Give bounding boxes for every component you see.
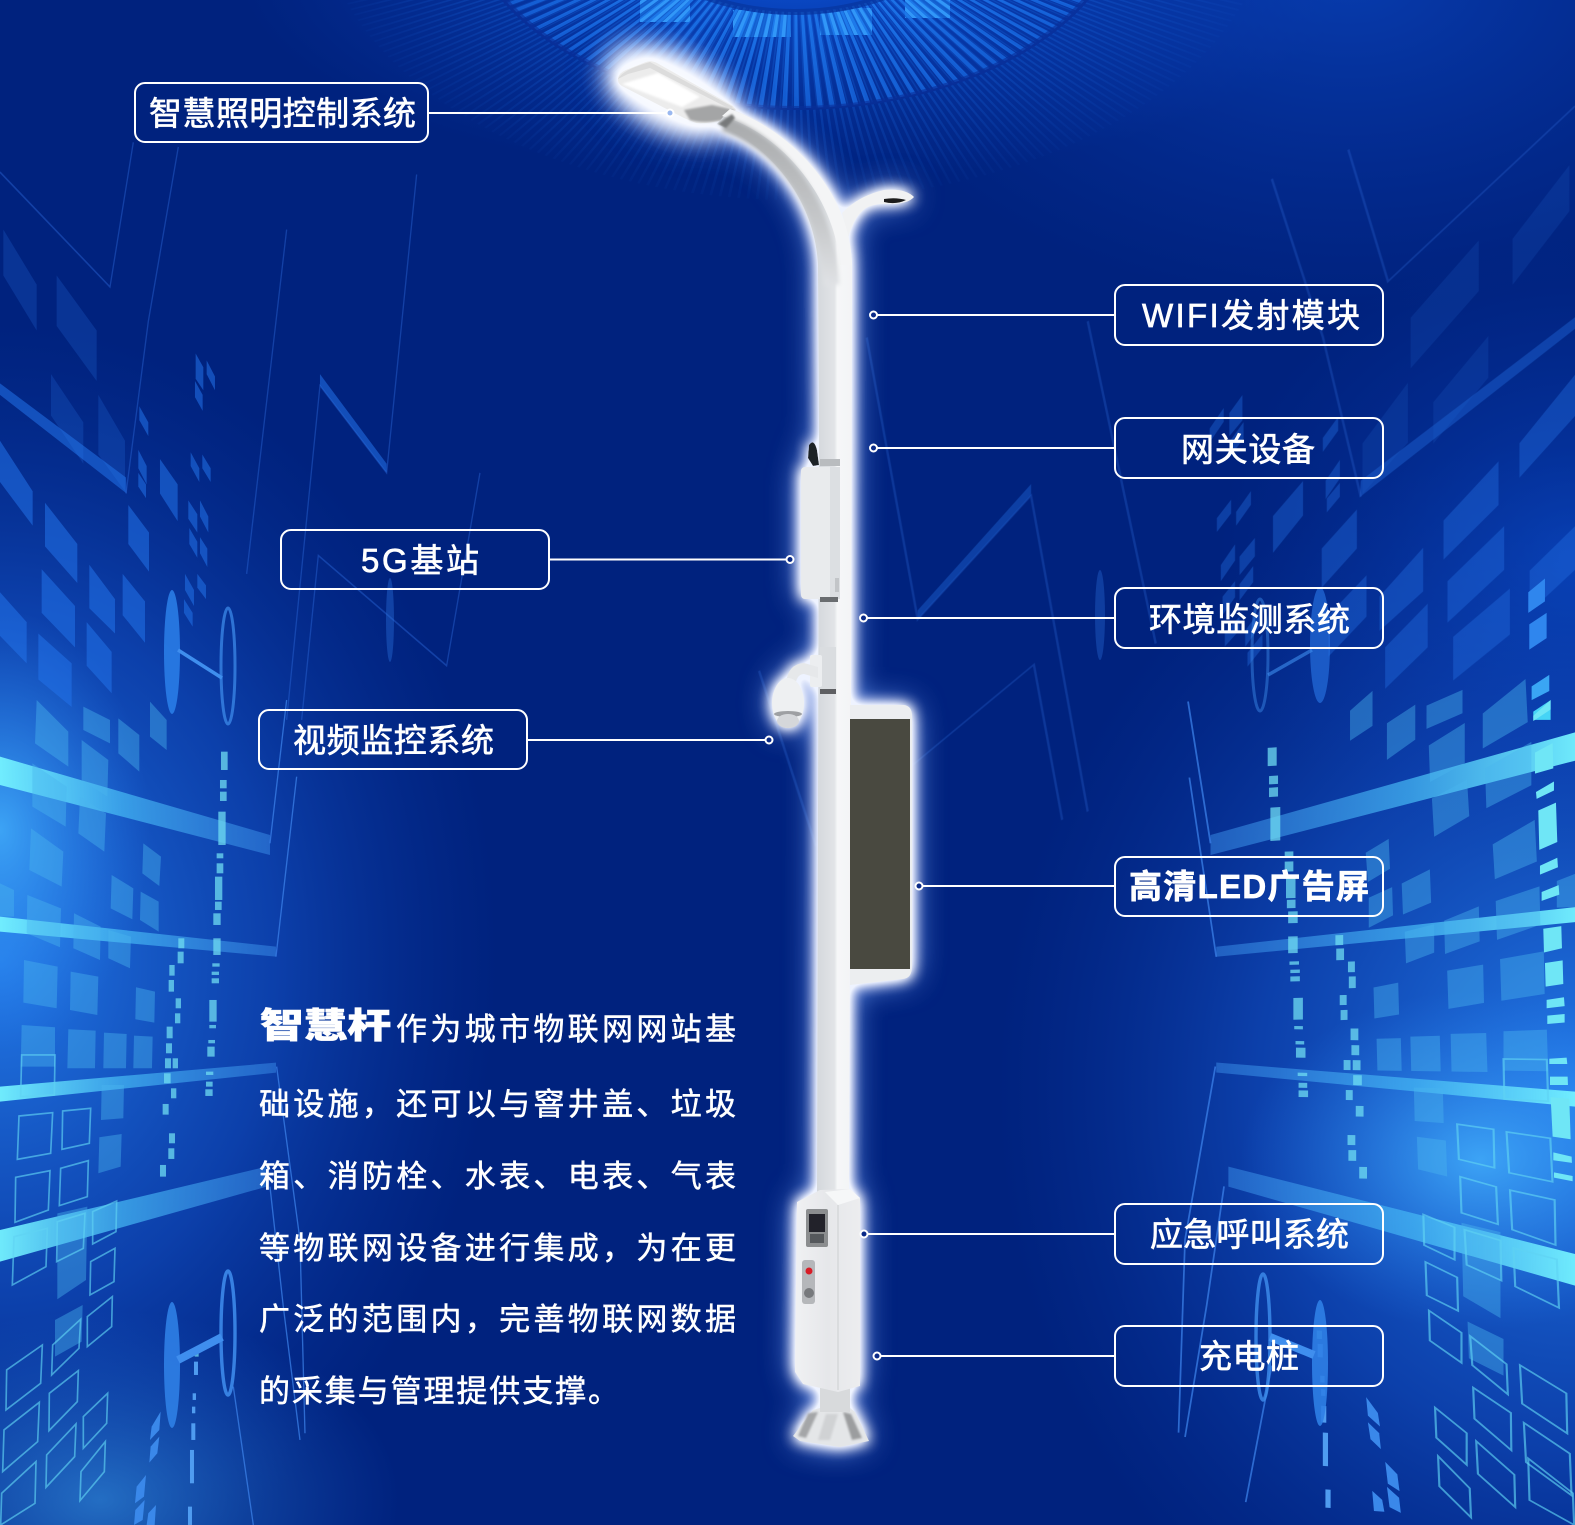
- callout: 视频监控系统: 视频监控系统: [293, 722, 494, 759]
- icon: charging and emergency cabinet: [793, 1189, 869, 1447]
- callout: 应急呼叫系统: 应急呼叫系统: [1150, 1216, 1349, 1253]
- callout: WIFI发射模块: WIFI发射模块: [1142, 297, 1360, 334]
- heading: 智慧杆: 智慧杆: [260, 1007, 391, 1046]
- callout: 5G基站: 5G基站: [361, 542, 479, 579]
- callout: 充电桩: 充电桩: [1199, 1338, 1299, 1375]
- text block: description: 箱、消防栓、水表、电表、气表: [259, 1159, 736, 1194]
- text block: description: 础设施，还可以与窨井盖、垃圾: [259, 1087, 736, 1122]
- callout: 环境监测系统: [860, 588, 1383, 648]
- text block: description: 等物联网设备进行集成，为在更: [259, 1231, 736, 1266]
- icon: dome camera with bracket: [772, 647, 836, 728]
- callout: 5G基站: [281, 530, 794, 589]
- text block: description: 作为城市物联网网站基: [396, 1012, 736, 1047]
- callout: 高清LED广告屏: [916, 857, 1383, 916]
- callout: 网关设备: 网关设备: [1181, 431, 1315, 468]
- text block: description: 广泛的范围内，完善物联网数据: [259, 1302, 736, 1337]
- smart pole: [602, 40, 914, 1447]
- left tech pattern: [0, 142, 480, 1525]
- LED advertising screen: [850, 705, 912, 985]
- callout: WIFI发射模块: [870, 285, 1383, 345]
- callout: 智慧照明控制系统: 智慧照明控制系统: [149, 95, 416, 132]
- callout: 网关设备: [870, 418, 1383, 478]
- pole and curved arm: [717, 109, 852, 1195]
- icon: 5G base station box: [801, 442, 840, 602]
- radial tech rings at top: [390, 0, 1200, 155]
- callout: 应急呼叫系统: [860, 1204, 1383, 1264]
- callout: 智慧照明控制系统: [135, 83, 674, 142]
- callout: 环境监测系统: 环境监测系统: [1149, 601, 1350, 638]
- icon: lamp head: [602, 40, 738, 144]
- callout: 充电桩: [874, 1326, 1383, 1386]
- callout: 高清LED广告屏: 高清LED广告屏: [1129, 868, 1369, 905]
- callout: 视频监控系统: [259, 710, 772, 769]
- text block: description: [259, 1007, 736, 1409]
- right tech pattern (perspective mirror of the left): [759, 76, 1575, 1525]
- text block: description: 的采集与管理提供支撑。: [259, 1374, 619, 1409]
- icon: small side lamp: [842, 190, 914, 238]
